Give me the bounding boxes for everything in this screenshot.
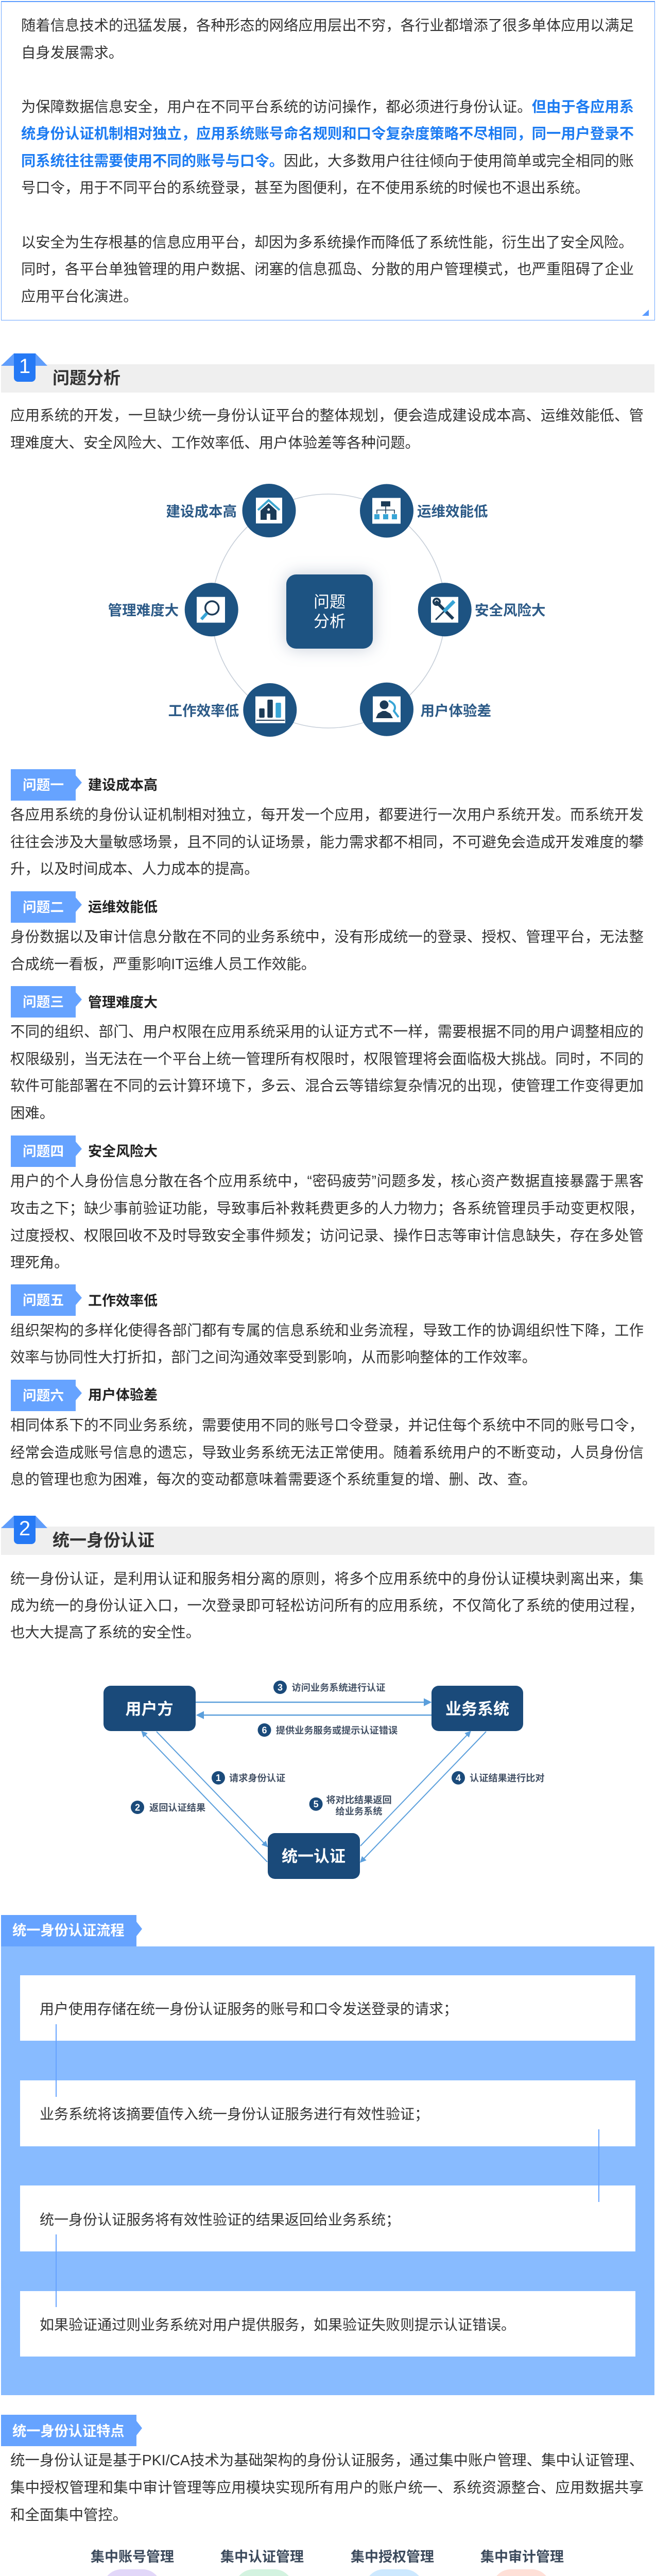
label: step 4: 4	[456, 1773, 461, 1783]
text block: intro paragraph 3: 应用平台化演进。	[21, 288, 137, 304]
connector: step 2 to 3	[598, 2129, 599, 2202]
label: step 4	[452, 1771, 545, 1785]
node: 管理难度大	[108, 583, 238, 636]
tag: 问题五: 问题五	[23, 1293, 64, 1308]
label: step 6: 6	[262, 1725, 267, 1735]
text block: problem 1: 各应用系统的身份认证机制相对独立，每开发一个应用，都要进行一次用户系统开发。而系统开发	[10, 807, 644, 823]
text block: intro paragraph 3	[21, 234, 634, 304]
text block: intro paragraph 3: 同时，各平台单独管理的用户数据、闭塞的信息孤岛、分散的用户管理模式，也严重阻碍了企业	[21, 261, 634, 277]
node: 建设成本高: 建设成本高	[166, 503, 237, 519]
label: step 3	[273, 1681, 385, 1694]
icon: lock	[103, 2569, 161, 2576]
text block: intro paragraph 2: 为保障数据信息安全，用户在不同平台系统的访问操作，都必须进行身份认证。但由于各应用系	[21, 98, 634, 115]
title: 建设成本高: 建设成本高	[88, 777, 158, 793]
heading: 集中认证管理: 集中认证管理	[220, 2549, 304, 2565]
label: step 6	[257, 1723, 398, 1737]
panel: authentication flow	[1, 1946, 654, 2395]
diagram: problem analysis hub	[108, 484, 546, 737]
box: 用户方	[103, 1686, 196, 1731]
text block: problem 2: 身份数据以及审计信息分散在不同的业务系统中，没有形成统一的登录、授权、管理平台，无法整	[10, 929, 644, 945]
label tag: 统一身份认证特点	[1, 2415, 142, 2446]
card: step 1: 用户使用存储在统一身份认证服务的账号和口令发送登录的请求；	[40, 2001, 458, 2016]
text block: problem 6: 息的管理也愈为困难，每次的变动都意味着需要逐个系统重复的增、删、改、查。	[10, 1471, 537, 1488]
label: step 3: 访问业务系统进行认证	[291, 1682, 385, 1693]
card: step 4	[20, 2291, 635, 2357]
text block: features intro: 集中授权管理和集中审计管理等应用模块实现所有用户的账户统一、系统资源整合、应用数据共享	[10, 2480, 644, 2496]
title: 运维效能低: 运维效能低	[88, 900, 158, 915]
text block: problem 4: 用户的个人身份信息分散在各个应用系统中，“密码疲劳”问题多发，核心资产数据直接暴露于黑客	[10, 1173, 644, 1190]
title: 安全风险大: 安全风险大	[88, 1144, 158, 1159]
node: 工作效率低	[168, 683, 297, 737]
card: step 3	[20, 2185, 635, 2251]
node: 运维效能低	[360, 484, 488, 538]
node: 工作效率低: 工作效率低	[168, 703, 239, 719]
card: step 2	[20, 2080, 635, 2146]
tag: 问题六: 问题六	[23, 1388, 64, 1403]
panel: intro box	[1, 1, 655, 320]
box: 用户方: 用户方	[126, 1700, 173, 1718]
text block: section 2 intro: 成为统一的身份认证入口，一次登录即可轻松访问所有的应用系统，不仅简化了系统的使用过程，	[10, 1598, 644, 1614]
tag: 问题一: 问题一	[23, 777, 64, 793]
text block: problem 4: 攻击之下；缺少事前验证功能，导致事后补救耗费更多的人力物力；各系统管理员手动变更权限，	[10, 1200, 644, 1217]
text block: problem 6	[10, 1417, 644, 1488]
tag: 问题六	[11, 1380, 82, 1411]
text block: problem 6: 相同体系下的不同业务系统，需要使用不同的账号口令登录，并记住每个系统中不同的账号口令，	[10, 1417, 644, 1434]
text block: intro paragraph 3: 以安全为生存根基的信息应用平台，却因为多系统操作而降低了系统性能，衍生出了安全风险。	[21, 234, 633, 250]
text block: problem 1: 升，以及时间成本、人力成本的提高。	[10, 861, 259, 877]
text block: problem 2: 合成统一看板，严重影响IT运维人员工作效能。	[10, 956, 316, 973]
heading: section 2 统一身份认证	[1, 1516, 654, 1555]
text block: section 1 intro: 理难度大、安全风险大、工作效率低、用户体验差等各种问题。	[10, 435, 420, 451]
text block: intro paragraph 2	[21, 98, 634, 196]
title: 用户体验差: 用户体验差	[88, 1387, 158, 1403]
text block: features intro: 统一身份认证是基于PKI/CA技术为基础架构的身份认证服务，通过集中账户管理、集中认证管理、	[10, 2452, 644, 2469]
ring	[212, 494, 445, 728]
node: 建设成本高	[166, 484, 296, 537]
label: step 2	[131, 1801, 205, 1814]
text block: problem 3: 困难。	[10, 1105, 54, 1122]
node: 安全风险大	[418, 583, 546, 636]
text block: section 2 intro	[10, 1571, 644, 1641]
card: step 4: 如果验证通过则业务系统对用户提供服务，如果验证失败则提示认证错误。	[40, 2317, 515, 2333]
heading: section 1 问题分析	[1, 353, 654, 393]
text block: intro paragraph 2: 号口令，用于不同平台的系统登录，甚至为图便利，在不使用系统的时候也不退出系统。	[21, 179, 590, 196]
title: 工作效率低: 工作效率低	[88, 1293, 158, 1309]
arrow: step 3	[196, 1702, 430, 1703]
tag: 问题三: 问题三	[23, 994, 64, 1010]
text block: problem 5	[10, 1323, 644, 1366]
label tag: 统一身份认证流程: 统一身份认证流程	[12, 1922, 125, 1938]
node: 管理难度大: 管理难度大	[108, 602, 179, 618]
text block: problem 4: 过度授权、权限回收不及时导致安全事件频发；访问记录、操作日志等审计信息缺失，存在多处管	[10, 1228, 644, 1244]
text block: intro paragraph 1	[21, 17, 634, 61]
label: step 5: 给业务系统	[336, 1806, 382, 1817]
text block: problem 4	[10, 1173, 644, 1271]
text block: features intro	[10, 2452, 644, 2523]
heading: 集中授权管理: 集中授权管理	[351, 2549, 434, 2565]
text block: intro paragraph 1: 自身发展需求。	[21, 44, 123, 61]
box: 业务系统	[431, 1686, 523, 1731]
label: step 3: 3	[278, 1683, 283, 1693]
tag: 问题三	[11, 986, 82, 1018]
text block: section 2 intro: 统一身份认证，是利用认证和服务相分离的原则，将多个应用系统中的身份认证模块剥离出来，集	[10, 1571, 644, 1587]
label: step 5: 5	[314, 1799, 319, 1809]
tag: 问题四	[11, 1136, 82, 1167]
box: 统一认证: 统一认证	[282, 1848, 346, 1866]
diagram: unified authentication triangle	[103, 1681, 545, 1879]
node: 用户体验差	[360, 683, 491, 736]
text block: intro paragraph 2: 同系统往往需要使用不同的账号与口令。因此，大多数用户往往倾向于使用简单或完全相同的账	[21, 152, 634, 169]
label: step 1: 请求身份认证	[229, 1773, 285, 1784]
label: step 4: 认证结果进行比对	[470, 1773, 545, 1784]
text block: problem 6: 经常会造成账号信息的遗忘，导致业务系统无法正常使用。随着系统用户的不断变动，人员身份信	[10, 1445, 644, 1461]
heading: 集中审计管理: 集中审计管理	[480, 2549, 564, 2565]
label: step 6: 提供业务服务或提示认证错误	[276, 1725, 398, 1736]
tag: 问题五	[11, 1284, 82, 1316]
label: step 2: 返回认证结果	[149, 1803, 205, 1813]
heading: 集中账号管理: 集中账号管理	[91, 2549, 174, 2565]
connector: step 3 to 4	[56, 2234, 57, 2307]
icon: clipboard	[492, 2569, 550, 2576]
card: step 2: 业务系统将该摘要值传入统一身份认证服务进行有效性验证；	[40, 2106, 429, 2122]
label tag: 统一身份认证特点: 统一身份认证特点	[12, 2423, 125, 2439]
label: step 5	[309, 1795, 392, 1817]
text block: intro paragraph 2: 统身份认证机制相对独立，应用系统账号命名规则和口令复杂度策略不尽相同，同一用户登录不	[21, 125, 634, 142]
node: 安全风险大: 安全风险大	[475, 602, 546, 618]
node: 用户体验差: 用户体验差	[420, 703, 491, 719]
text block: problem 1: 往往会涉及大量敏感场景，且不同的认证场景，能力需求都不相同，不可避免会造成开发难度的攀	[10, 834, 644, 851]
label: step 1	[212, 1771, 285, 1785]
title: 管理难度大: 管理难度大	[88, 995, 158, 1010]
arrow: step 4	[360, 1732, 486, 1862]
label: step 1: 1	[216, 1773, 221, 1783]
label tag: 统一身份认证流程	[1, 1915, 142, 1946]
card: step 3: 统一身份认证服务将有效性验证的结果返回给业务系统；	[40, 2212, 400, 2228]
box: 统一认证	[268, 1833, 360, 1879]
tag: 问题二: 问题二	[23, 900, 64, 915]
box: 业务系统: 业务系统	[445, 1700, 509, 1718]
text block: problem 3: 不同的组织、部门、用户权限在应用系统采用的认证方式不一样，需要根据不同的用户调整相应的	[10, 1024, 644, 1040]
connector: step 1 to 2	[56, 2024, 57, 2097]
text block: problem 3: 软件可能部署在不同的云计算环境下，多云、混合云等错综复杂情况的出现，使管理工作变得更加	[10, 1078, 644, 1094]
text block: section 1 intro	[10, 408, 644, 451]
text block: features intro: 和全面集中管控。	[10, 2507, 127, 2523]
text block: problem 5: 组织架构的多样化使得各部门都有专属的信息系统和业务流程，导致工作的协调组织性下降，工作	[10, 1323, 644, 1339]
icon: badge	[365, 2569, 423, 2576]
text block: problem 5: 效率与协同性大打折扣，部门之间沟通效率受到影响，从而影响整体的工作效率。	[10, 1349, 537, 1366]
text block: problem 4: 理死角。	[10, 1255, 69, 1271]
arrow: step 2	[142, 1732, 267, 1862]
text block: section 2 intro: 也大大提高了系统的安全性。	[10, 1624, 200, 1641]
card: step 1	[20, 1975, 635, 2041]
center box: 问题分析	[286, 574, 373, 649]
text block: problem 3: 权限级别，当无法在一个平台上统一管理所有权限时，权限管理将会面临极大挑战。同时，不同的	[10, 1051, 644, 1067]
text block: problem 1	[10, 807, 644, 877]
text block: section 1 intro: 应用系统的开发，一旦缺少统一身份认证平台的整体规划，便会造成建设成本高、运维效能低、管	[10, 408, 644, 424]
arrow: step 1	[157, 1732, 267, 1846]
tag: 问题一	[11, 769, 82, 801]
node: 运维效能低: 运维效能低	[417, 503, 488, 519]
heading: section 1 问题分析: 问题分析	[53, 368, 120, 387]
text block: problem 3	[10, 1024, 644, 1122]
heading: section 2 统一身份认证: 统一身份认证	[53, 1531, 154, 1550]
icon: corner triangle	[642, 310, 649, 316]
label: step 5: 将对比结果返回	[326, 1795, 392, 1805]
center box: 问题分析: 分析	[314, 613, 346, 631]
center box: 问题分析: 问题	[314, 593, 346, 611]
heading: section 2 统一身份认证: 2	[19, 1517, 30, 1540]
label: step 2: 2	[135, 1802, 140, 1812]
arrow: step 5	[360, 1732, 470, 1846]
arrow: step 6	[197, 1715, 431, 1716]
text block: problem 2	[10, 929, 644, 973]
tag: 问题四: 问题四	[23, 1144, 64, 1159]
heading: section 1 问题分析: 1	[19, 355, 30, 378]
text block: intro paragraph 1: 随着信息技术的迅猛发展，各种形态的网络应用层出不穷，各行业都增添了很多单体应用以满足	[21, 17, 634, 33]
icon: stamp	[235, 2569, 293, 2576]
tag: 问题二	[11, 891, 82, 923]
